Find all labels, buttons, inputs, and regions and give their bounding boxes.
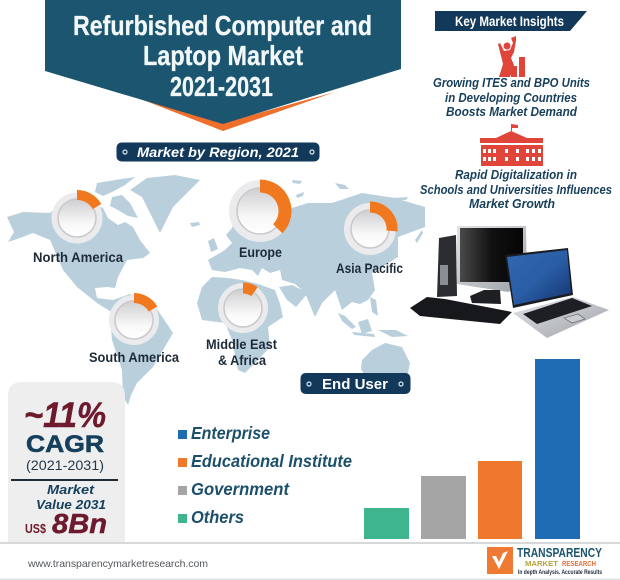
CAGR label: CAGR	[26, 431, 104, 458]
legend: end user: Enterprise	[191, 423, 270, 443]
market value label: Value 2031	[36, 497, 106, 512]
world map	[7, 175, 425, 405]
text: insight 2: Market Growth	[469, 196, 555, 211]
logo: RESEARCH	[562, 559, 596, 568]
logo: MARKET	[525, 559, 558, 568]
market value label: Market	[47, 482, 95, 497]
title text	[73, 10, 372, 102]
legend: end user: Government	[191, 479, 290, 499]
region labels: Europe	[239, 244, 282, 260]
pill: market by region: Market by Region, 2021	[137, 144, 299, 160]
legend: end user	[178, 423, 352, 527]
pill: market by region	[116, 142, 320, 162]
pill: end user	[300, 373, 410, 394]
text: insight 1	[433, 75, 590, 119]
legend: end user: Others	[191, 507, 244, 527]
text: insight 2	[420, 167, 612, 211]
footer	[0, 542, 620, 580]
region labels	[33, 244, 403, 368]
text: insight 1: Boosts Market Demand	[446, 104, 578, 119]
title text: 2021-2031	[170, 71, 273, 102]
CAGR period: (2021-2031)	[26, 458, 104, 473]
panel: key market insights heading: Key Market Insights	[455, 13, 564, 29]
legend: end user: Educational Institute	[191, 451, 352, 471]
panel: CAGR and market value	[8, 382, 125, 543]
computer and laptop illustration	[410, 226, 609, 338]
region labels: Middle East	[206, 336, 277, 352]
text: insight 1: in Developing Countries	[445, 90, 577, 105]
logo	[487, 545, 602, 576]
donut: middle east and africa	[218, 283, 268, 333]
pill: end user: End User	[322, 376, 388, 393]
panel: key market insights heading	[435, 11, 587, 31]
donut: europe	[229, 180, 291, 242]
region labels: & Africa	[218, 352, 266, 368]
icon: university building	[480, 124, 543, 166]
text: insight 1: Growing ITES and BPO Units	[433, 75, 590, 90]
title text: Refurbished Computer and	[73, 10, 372, 41]
market value figure: 8Bn	[52, 508, 107, 539]
region labels: North America	[33, 249, 123, 265]
region labels: South America	[89, 349, 179, 365]
CAGR figure: ~11%	[24, 396, 106, 435]
market value figure: US$	[25, 521, 47, 536]
title banner	[45, 0, 401, 131]
market value figure	[25, 508, 107, 539]
icon: person on bar chart	[498, 36, 525, 77]
region labels: Asia Pacific	[336, 260, 403, 276]
donut: asia pacific	[344, 203, 396, 255]
footer url: www.transparencymarketresearch.com	[27, 558, 208, 570]
text: insight 2: Rapid Digitalization in	[455, 167, 577, 182]
bar chart: end user	[364, 359, 580, 539]
title text: Laptop Market	[143, 40, 303, 71]
market value label	[36, 482, 106, 512]
donut: south america	[109, 295, 159, 345]
donut: north america	[52, 192, 102, 244]
